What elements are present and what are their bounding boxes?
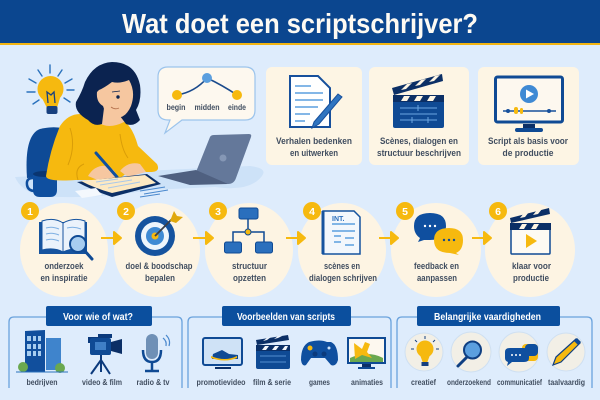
- arrow 3: [286, 232, 305, 244]
- icon: animaties: [348, 338, 385, 369]
- panel: voorbeelden van scripts: film & serie: [253, 378, 291, 387]
- step 5: feedback: [391, 202, 481, 297]
- step 4: scènes schrijven: 4: [309, 206, 315, 218]
- panel: voorbeelden van scripts: animaties: [351, 378, 383, 387]
- arrow 2: [193, 232, 213, 244]
- step 6: klaar voor productie: klaar voor: [512, 261, 551, 271]
- header banner: [0, 0, 600, 45]
- panel: voor wie of wat: [9, 306, 182, 388]
- step 2: doel bepalen: doel & boodschap: [126, 261, 193, 271]
- pen: [96, 153, 117, 177]
- step 3: structuur: opzetten: [233, 273, 266, 283]
- step 3: structuur: 3: [215, 206, 221, 218]
- step 3: structuur: structuur: [232, 261, 267, 271]
- speech bubble: story arc: [158, 67, 255, 133]
- step 4: scènes schrijven: [298, 202, 386, 297]
- panel: voorbeelden van scripts: promotievideo: [196, 378, 246, 387]
- panel: belangrijke vaardigheden: onderzoekend: [447, 378, 491, 387]
- icon: video camera: [88, 334, 122, 374]
- speech bubble: story arc: midden: [194, 103, 220, 112]
- arrow 1: [101, 232, 121, 244]
- icon: onderzoekend: [451, 332, 491, 372]
- icon: light bulb: [27, 65, 74, 114]
- step 2: doel bepalen: 2: [123, 206, 129, 218]
- sweater: [46, 114, 158, 180]
- arrow 5: [472, 232, 491, 244]
- panel: voor wie of wat: radio & tv: [136, 378, 170, 387]
- card: verhalen bedenken: [266, 67, 362, 165]
- card: scènes beschrijven: [369, 67, 469, 165]
- icon: building: [16, 330, 68, 373]
- speech bubble: story arc: begin: [166, 103, 186, 112]
- step 3: structuur: [205, 202, 293, 297]
- step 1: onderzoek: 1: [27, 206, 33, 218]
- hands: [88, 163, 146, 181]
- step 6: klaar voor productie: 6: [495, 206, 501, 218]
- panel: voorbeelden van scripts: Voorbeelden van scripts: [237, 311, 335, 323]
- panel: belangrijke vaardigheden: [397, 306, 592, 388]
- arrow 4: [379, 232, 398, 244]
- card: scènes beschrijven: Scènes, dialogen en: [380, 136, 458, 146]
- open notebook: [77, 174, 161, 197]
- step 4: scènes schrijven: INT.: [332, 216, 344, 223]
- laptop: [158, 134, 251, 185]
- panel: belangrijke vaardigheden: creatief: [411, 378, 436, 387]
- card: verhalen bedenken: en uitwerken: [290, 148, 338, 158]
- card: verhalen bedenken: Verhalen bedenken: [276, 136, 352, 146]
- step 6: klaar voor productie: [485, 202, 575, 297]
- mug: [27, 171, 57, 197]
- step 5: feedback: aanpassen: [417, 273, 457, 283]
- card: script als basis: de productie: [502, 148, 554, 158]
- illustration: writer at desk: [15, 62, 264, 198]
- card: scènes beschrijven: structuur beschrijven: [377, 148, 461, 158]
- icon: film en serie: [256, 335, 290, 369]
- icon: game controller: [301, 340, 338, 365]
- step 2: doel bepalen: [114, 202, 200, 297]
- card: script als basis: [478, 67, 579, 165]
- speech bubble: story arc: einde: [228, 103, 246, 112]
- neck: [98, 108, 124, 126]
- icon: microphone: [143, 334, 170, 371]
- icon: communicatief: [499, 332, 539, 372]
- panel: voorbeelden van scripts: [188, 306, 391, 388]
- step 1: onderzoek: onderzoek: [44, 261, 84, 271]
- panel: voor wie of wat: bedrijven: [26, 378, 58, 387]
- face: [97, 80, 133, 118]
- icon: promotievideo: [203, 338, 242, 369]
- panel: belangrijke vaardigheden: Belangrijke vaardigheden: [434, 311, 541, 323]
- step 1: onderzoek: [20, 202, 108, 297]
- desk: [15, 166, 264, 197]
- title: Wat doet een scriptschrijver?: [122, 8, 478, 39]
- chair: [27, 127, 62, 178]
- step 2: doel bepalen: bepalen: [145, 273, 175, 283]
- step 4: scènes schrijven: dialogen schrijven: [309, 273, 377, 283]
- panel: voor wie of wat: video & film: [82, 378, 122, 387]
- step 1: onderzoek: en inspiratie: [40, 273, 88, 283]
- step 5: feedback: feedback en: [414, 261, 459, 271]
- icon: creatief: [405, 333, 443, 371]
- step 4: scènes schrijven: scènes en: [324, 261, 360, 271]
- panel: belangrijke vaardigheden: communicatief: [497, 378, 542, 387]
- card: script als basis: Script als basis voor: [488, 136, 568, 146]
- hair: [76, 62, 140, 125]
- step 6: klaar voor productie: productie: [513, 273, 549, 283]
- panel: belangrijke vaardigheden: taalvaardig: [548, 378, 585, 387]
- step 5: feedback: 5: [402, 206, 408, 218]
- panel: voorbeelden van scripts: games: [309, 378, 330, 387]
- panel: voor wie of wat: Voor wie of wat?: [63, 311, 133, 323]
- icon: taalvaardig: [547, 333, 585, 371]
